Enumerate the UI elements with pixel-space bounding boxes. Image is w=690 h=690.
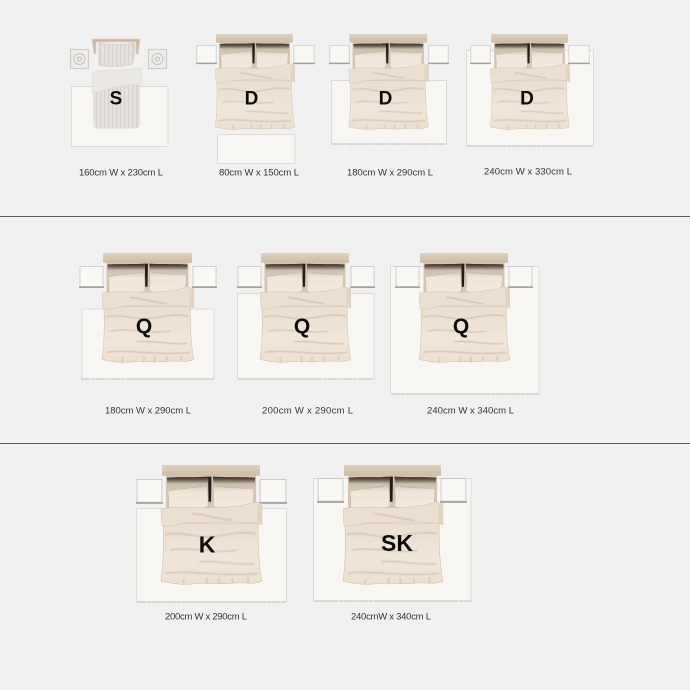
- size label: 180cm W x 290cm L: [105, 406, 191, 416]
- nightstand left: [237, 266, 262, 288]
- size label: 160cm W x 230cm L: [79, 168, 163, 178]
- rug: [82, 309, 214, 379]
- rug: [218, 134, 295, 164]
- size label: 240cmW x 340cm L: [351, 612, 431, 622]
- bed: [419, 253, 510, 362]
- nightstand left: [395, 266, 420, 288]
- divider lines: [0, 216, 690, 444]
- letter D: D: [245, 88, 258, 110]
- nightstand right: [350, 266, 375, 288]
- nightstand right: [293, 45, 315, 64]
- panel: queen bed with 200cm rug: [237, 253, 375, 416]
- size label: 180cm W x 290cm L: [347, 168, 433, 178]
- nightstand right: [259, 480, 287, 504]
- panel: double bed with 240cm rug: [466, 34, 594, 178]
- bed: [349, 34, 429, 129]
- nightstand left: [470, 45, 491, 64]
- letter Q: Q: [136, 315, 152, 338]
- nightstand right: [440, 479, 467, 503]
- nightstand left: [136, 480, 163, 504]
- panel: super king bed with 240cm rug: [314, 465, 471, 622]
- nightstand right: [568, 45, 590, 64]
- nightstand left: [329, 45, 350, 64]
- nightstand right: [148, 50, 166, 68]
- nightstand left: [70, 50, 88, 68]
- panel: double bed with 180cm rug: [329, 34, 449, 178]
- panel: king bed with 200cm rug: [136, 465, 287, 622]
- nightstand left: [196, 45, 217, 64]
- size label: 200cm W x 290cm L: [262, 406, 353, 416]
- letters SK: SK: [381, 530, 413, 556]
- bed: [260, 253, 351, 362]
- nightstand right: [192, 266, 217, 288]
- bed: [343, 465, 443, 584]
- bed: [490, 34, 570, 129]
- rug: [136, 508, 286, 602]
- rug: [314, 478, 471, 601]
- letter Q: Q: [294, 315, 310, 338]
- size label: 240cm W x 340cm L: [427, 406, 514, 416]
- letter K: K: [199, 532, 216, 558]
- nightstand right: [508, 266, 533, 288]
- size label: 240cm W x 330cm L: [484, 166, 572, 178]
- rug: [332, 80, 446, 144]
- size label: 200cm W x 290cm L: [165, 612, 247, 622]
- nightstand left: [79, 266, 104, 288]
- rug: [72, 86, 168, 146]
- single bed: [92, 39, 142, 128]
- bed: [161, 465, 262, 584]
- nightstand right: [428, 45, 449, 64]
- panel: queen bed with 180cm rug: [79, 253, 217, 416]
- size label: 80cm W x 150cm L: [219, 168, 299, 178]
- letter D: D: [520, 88, 534, 110]
- panel: double bed with 80cm rug: [196, 34, 315, 178]
- letter Q: Q: [453, 315, 469, 338]
- letter S: S: [110, 88, 122, 110]
- panel: single bed with 160cm rug: [70, 39, 168, 178]
- bed: [215, 34, 295, 129]
- letter D: D: [379, 88, 392, 110]
- nightstand left: [317, 479, 344, 503]
- rug: [466, 50, 594, 146]
- bed: [102, 253, 194, 362]
- panel: queen bed with 240cm rug: [390, 253, 539, 416]
- rug: [238, 294, 374, 379]
- rug: [390, 266, 539, 394]
